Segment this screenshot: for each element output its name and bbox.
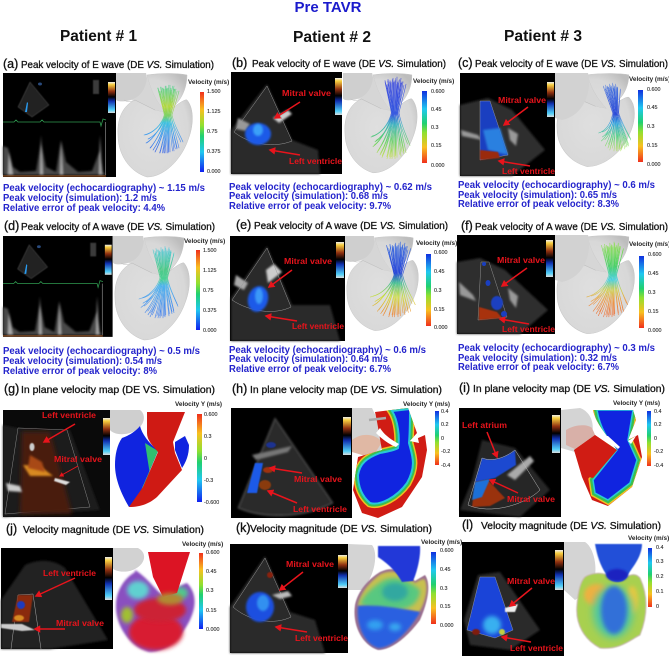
heading c: (c) [458, 56, 473, 70]
panel b: E wave patient 2 [229, 56, 454, 212]
colorbar h: 0.4 [441, 409, 448, 415]
colorbar g: 0.3 [204, 434, 212, 440]
arrow f1 [502, 268, 527, 286]
arrow l2 [502, 637, 531, 642]
stats d [3, 346, 200, 377]
colorbar h: -0.4 [441, 463, 450, 469]
colorbar g: Velocity Y (m/s) [175, 401, 222, 408]
colorbar d: 0.000 [203, 328, 216, 334]
colorbar h: 0 [441, 436, 444, 442]
simulation volume render l [564, 542, 646, 648]
simulation velocity slice h [352, 408, 427, 518]
colorbar c: 0.45 [647, 105, 658, 111]
colorbar c [629, 76, 669, 168]
colorbar a [188, 79, 229, 175]
echo image i [459, 408, 561, 517]
arrow f2 [500, 319, 529, 324]
arrow l1 [510, 588, 532, 606]
echo image e [230, 236, 345, 341]
colorbar e [416, 240, 457, 331]
colorbar i: 0.4 [654, 409, 662, 415]
colorbar h: -0.2 [441, 449, 450, 455]
colorbar c: Velocity (m/s) [629, 76, 669, 83]
colorbar l [628, 535, 669, 610]
colorbar h: 0.2 [441, 422, 448, 428]
stats c: Peak velocity (echocardiography) ~ 0.6 m/s [458, 180, 655, 191]
mitral valve label f: Mitral valve [497, 255, 545, 265]
colorbar k: 0.600 [440, 548, 454, 554]
colorbar d: Velocity (m/s) [184, 238, 225, 245]
heading c: Peak velocity of E wave (DE VS. Simulation) [475, 59, 668, 70]
panel e: A wave patient 2 [229, 218, 457, 375]
colorbar f: 0.3 [648, 290, 656, 296]
colorbar j: 0.45 [206, 569, 216, 575]
heading a: Peak velocity of E wave (DE VS. Simulation) [21, 60, 214, 71]
colorbar d: 1.125 [203, 268, 216, 274]
stats f: Relative error of peak velocity: 6.7% [458, 362, 619, 373]
colorbar j: Velocity (m/s) [182, 541, 223, 548]
colorbar d: 0.375 [203, 308, 216, 314]
heading g: In plane velocity map (DE VS. Simulation) [21, 385, 215, 396]
mitral valve label g: Mitral valve [54, 454, 102, 464]
panel g: in plane velocity patient 1 [3, 382, 222, 517]
heading a: (a) [3, 57, 18, 71]
colorbar c: 0.3 [647, 124, 654, 130]
colorbar k [421, 539, 462, 629]
stats e [229, 345, 426, 375]
colorbar i: 0.2 [654, 422, 662, 428]
mitral valve label b: Mitral valve [282, 88, 331, 98]
heading b: (b) [232, 56, 247, 70]
column heading: patient 3: Patient # 3 [504, 28, 582, 45]
colorbar e: 0.45 [434, 269, 444, 275]
heading k: Velocity magnitude (DE VS. Simulation) [250, 524, 432, 535]
colorbar a: 0.75 [207, 129, 218, 135]
colorbar c: 0.600 [647, 87, 660, 93]
arrow e2 [266, 316, 297, 321]
heart model with streamlines b [343, 73, 417, 173]
colorbar j: 0.3 [206, 588, 214, 594]
colorbar a: 1.125 [207, 109, 220, 115]
colorbar l: 0.1 [656, 589, 664, 595]
stats b: Peak velocity (echocardiography) ~ 0.62 m/s [229, 182, 432, 193]
arrow k2 [276, 627, 307, 632]
arrow i1 [487, 432, 497, 457]
colorbar j: 0.600 [206, 550, 220, 556]
left ventricle label h: Left ventricle [293, 504, 347, 514]
colorbar b [413, 78, 454, 169]
stats a [3, 183, 205, 214]
colorbar e: Velocity (m/s) [416, 240, 457, 247]
left ventricle label k: Left ventricle [295, 633, 348, 643]
colorbar f [629, 241, 669, 334]
colorbar g: 0 [204, 456, 207, 462]
simulation volume render k [348, 544, 428, 650]
colorbar i: 0 [654, 436, 657, 442]
arrow b2 [270, 150, 300, 155]
panel h: in plane velocity patient 2 [231, 382, 450, 520]
heart model with streamlines c [555, 73, 634, 167]
colorbar f: 0.45 [648, 271, 658, 277]
heading d: Peak velocity of A wave (DE VS. Simulation) [21, 222, 215, 233]
mitral valve label e: Mitral valve [284, 256, 332, 266]
echo image g [3, 410, 110, 517]
colorbar c: 0.15 [647, 143, 658, 149]
colorbar l: 0.2 [656, 574, 664, 580]
stats f: Peak velocity (simulation): 0.32 m/s [458, 353, 617, 364]
colorbar b: Velocity (m/s) [413, 78, 454, 85]
colorbar e: 0.600 [434, 250, 448, 256]
colorbar l: 0 [656, 604, 659, 610]
heading f: Peak velocity of A wave (DE VS. Simulation) [475, 222, 668, 233]
stats e: Peak velocity (echocardiography) ~ 0.6 m/s [229, 345, 426, 356]
left ventricle label f: Left ventricle [502, 324, 555, 334]
colorbar a: 0.000 [207, 169, 220, 175]
panel l: velocity magnitude patient 3 [462, 518, 669, 656]
colorbar h [403, 401, 450, 469]
heading e: Peak velocity of A wave (DE VS. Simulation) [254, 221, 448, 232]
left ventricle label c: Left ventricle [502, 166, 555, 176]
colorbar b: 0.45 [431, 107, 442, 113]
heading h: In plane velocity map (DE VS. Simulation) [250, 385, 442, 396]
colorbar b: 0.600 [431, 89, 444, 95]
stats b [229, 182, 432, 212]
heart model with streamlines d [113, 236, 189, 340]
colorbar l: 0.3 [656, 559, 664, 565]
left atrium label i: Left atrium [462, 420, 507, 430]
stats f: Peak velocity (echocardiography) ~ 0.3 m/s [458, 343, 655, 354]
colorbar j: 0.000 [206, 627, 220, 633]
colorbar l: Velocity (m/s) [628, 535, 669, 542]
colorbar f: Velocity (m/s) [629, 241, 669, 248]
arrow i2 [490, 480, 518, 493]
colorbar i [613, 400, 663, 469]
heading k: (k) [236, 521, 251, 535]
colorbar e: 0.3 [434, 288, 442, 294]
colorbar d [184, 238, 225, 334]
panel k: velocity magnitude patient 2 [230, 521, 462, 653]
panel d: A wave patient 1 [3, 219, 225, 377]
heart model with streamlines a [116, 73, 192, 177]
left ventricle label g: Left ventricle [42, 410, 96, 420]
colorbar e: 0.15 [434, 307, 444, 313]
colorbar k: 0.3 [440, 586, 448, 592]
column heading: patient 1: Patient # 1 [60, 28, 137, 45]
colorbar i: -0.4 [654, 463, 663, 469]
mitral valve label j: Mitral valve [56, 618, 104, 628]
colorbar d: 1.500 [203, 248, 216, 254]
stats e: Peak velocity (simulation): 0.64 m/s [229, 354, 388, 365]
heart model with streamlines e [345, 236, 418, 331]
heading f: (f) [461, 219, 473, 233]
stats b: Relative error of peak velocity: 9.7% [229, 201, 391, 212]
arrow c2 [499, 161, 530, 166]
stats a: Peak velocity (simulation): 1.2 m/s [3, 193, 157, 204]
echo image c [460, 73, 555, 176]
stats a: Relative error of peak velocity: 4.4% [3, 203, 165, 214]
left ventricle label j: Left ventricle [43, 568, 96, 578]
colorbar d: 0.75 [203, 288, 214, 294]
heading d: (d) [4, 219, 19, 233]
colorbar a: 1.500 [207, 89, 220, 95]
left ventricle label e: Left ventricle [292, 321, 344, 331]
heading e: (e) [236, 218, 251, 232]
doppler echo a [3, 73, 116, 177]
heading i: (i) [459, 381, 470, 395]
colorbar k: 0.000 [440, 623, 454, 629]
heading j: (j) [6, 522, 17, 536]
doppler echo d [3, 236, 113, 337]
colorbar g: -0.3 [204, 478, 213, 484]
colorbar f: 0.15 [648, 309, 658, 315]
arrow j2 [35, 628, 65, 630]
colorbar a: 0.375 [207, 149, 220, 155]
heading h: (h) [232, 382, 247, 396]
colorbar k: Velocity (m/s) [421, 539, 462, 546]
stats d: Peak velocity (echocardiography) ~ 0.5 m/s [3, 346, 200, 357]
colorbar i: Velocity Y (m/s) [613, 400, 660, 407]
colorbar i: -0.2 [654, 449, 663, 455]
simulation volume render j [113, 548, 195, 652]
column heading: patient 2: Patient # 2 [293, 29, 371, 46]
colorbar j [182, 541, 223, 633]
colorbar g [175, 401, 222, 506]
left ventricle label b: Left ventricle [289, 156, 342, 166]
colorbar j: 0.15 [206, 608, 216, 614]
colorbar b: 0.15 [431, 143, 442, 149]
echo image j [1, 548, 113, 649]
colorbar b: 0.3 [431, 125, 438, 131]
colorbar l: 0.4 [656, 545, 664, 551]
stats c: Peak velocity (simulation): 0.65 m/s [458, 190, 617, 201]
colorbar g: 0.600 [204, 412, 218, 418]
stats c: Relative error of peak velocity: 8.3% [458, 199, 619, 210]
arrow k1 [280, 572, 303, 590]
colorbar k: 0.15 [440, 604, 450, 610]
heading b: Peak velocity of E wave (DE VS. Simulation) [252, 59, 446, 70]
panel a: E wave patient 1 [3, 57, 229, 214]
stats b: Peak velocity (simulation): 0.68 m/s [229, 191, 388, 202]
arrow b1 [275, 102, 300, 118]
echo image k [230, 544, 348, 653]
panel f: A wave patient 3 [457, 219, 669, 373]
mitral valve label i: Mitral valve [507, 494, 555, 504]
simulation velocity slice i [561, 408, 642, 506]
stats e: Relative error of peak velocity: 6.7% [229, 364, 391, 375]
colorbar h: Velocity Y (m/s) [403, 401, 450, 408]
heading l: Velocity magnitude (DE VS. Simulation) [481, 521, 661, 532]
echo image f [457, 235, 555, 334]
arrow g1 [44, 424, 75, 442]
arrow j1 [36, 578, 75, 596]
colorbar k: 0.45 [440, 567, 450, 573]
colorbar b: 0.000 [431, 163, 444, 169]
simulation velocity slice g [110, 410, 189, 507]
left ventricle label l: Left ventricle [510, 643, 563, 653]
heading i: In plane velocity map (DE VS. Simulation) [473, 384, 665, 395]
colorbar f: 0.600 [648, 252, 662, 258]
heart model with streamlines f [555, 235, 634, 334]
colorbar c: 0.000 [647, 162, 660, 168]
echo image h [231, 408, 352, 518]
arrow c1 [504, 107, 528, 125]
stats a: Peak velocity (echocardiography) ~ 1.15 m/s [3, 183, 205, 194]
panel j: velocity magnitude patient 1 [1, 522, 223, 652]
panel i: in plane velocity patient 3 [459, 381, 665, 517]
colorbar e: 0.000 [434, 325, 448, 331]
colorbar g: -0.600 [204, 500, 219, 506]
heading j: Velocity magnitude (DE VS. Simulation) [23, 525, 204, 536]
stats d: Relative error of peak velocity: 8% [3, 366, 157, 377]
stats c [458, 180, 655, 210]
mitral valve label h: Mitral valve [294, 474, 342, 484]
mitral valve label c: Mitral valve [498, 95, 546, 105]
stats f [458, 343, 655, 373]
echo image l [462, 542, 564, 656]
colorbar f: 0.000 [648, 328, 662, 334]
stats d: Peak velocity (simulation): 0.54 m/s [3, 356, 162, 367]
arrow h1 [270, 468, 302, 473]
colorbar a: Velocity (m/s) [188, 79, 229, 86]
arrow h2 [268, 491, 297, 503]
panel c: E wave patient 3 [458, 56, 669, 210]
mitral valve label k: Mitral valve [286, 559, 334, 569]
arrow e1 [269, 270, 292, 287]
echo image b [231, 72, 342, 174]
arrow g2 [60, 466, 78, 476]
heading l: (l) [462, 518, 473, 532]
heading g: (g) [4, 382, 19, 396]
mitral valve label l: Mitral valve [507, 576, 555, 586]
